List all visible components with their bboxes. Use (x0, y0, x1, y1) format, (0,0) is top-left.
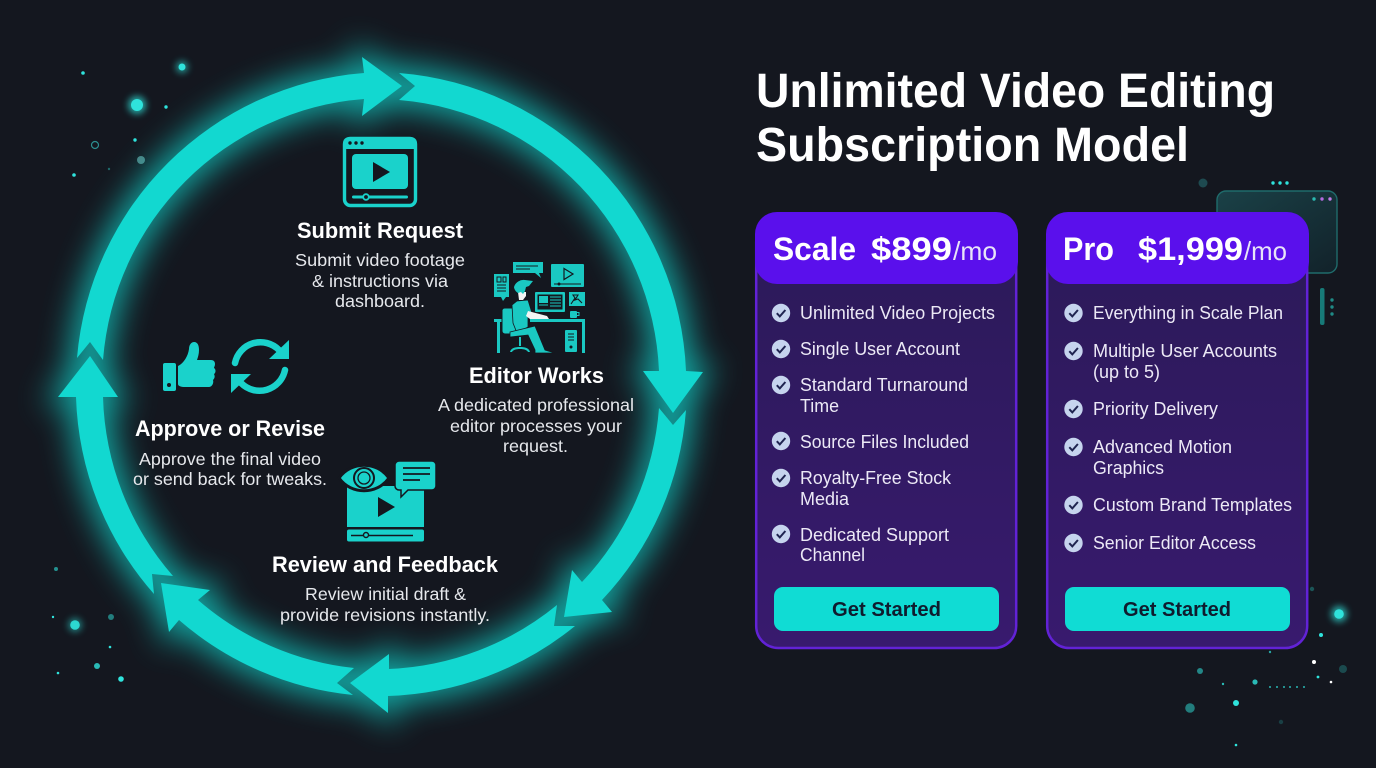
description (133, 449, 327, 489)
decorative window behind pro card (1198, 178, 1337, 325)
step: review and feedback (272, 461, 499, 625)
feature list: Channel (800, 545, 865, 565)
feature list: Media (800, 489, 850, 509)
description: & instructions via (312, 271, 448, 291)
plan price (871, 231, 997, 267)
feature list: Royalty-Free Stock (800, 468, 952, 488)
feature list: Standard Turnaround (800, 375, 968, 395)
description: provide revisions instantly. (280, 605, 490, 625)
description: or send back for tweaks. (133, 469, 327, 489)
icon: eye, video and speech bubble (339, 461, 436, 542)
feature list: Advanced Motion (1093, 437, 1232, 457)
title: Subscription Model (756, 119, 1189, 172)
description (295, 250, 465, 311)
card header (755, 212, 1018, 284)
feature list: Senior Editor Access (1093, 533, 1256, 553)
button (774, 587, 999, 631)
feature list: Time (800, 396, 839, 416)
heading: Review and Feedback (272, 552, 499, 577)
step: submit request (295, 137, 465, 311)
heading: Submit Request (297, 218, 464, 243)
feature list: Priority Delivery (1093, 399, 1218, 419)
feature list: Dedicated Support (800, 525, 949, 545)
feature list: Multiple User Accounts (1093, 341, 1277, 361)
decorative particles bottom right (1185, 587, 1347, 746)
feature list: Source Files Included (800, 432, 969, 452)
plan price: /mo (953, 236, 997, 266)
plan price: /mo (1244, 236, 1287, 266)
card header (1046, 212, 1309, 284)
cycle ring of six glowing arrows (58, 57, 703, 713)
decorative particles left bottom (52, 567, 124, 682)
feature list: Graphics (1093, 458, 1164, 478)
description: Review initial draft & (305, 584, 466, 604)
plan price: $1,999 (1138, 231, 1243, 267)
plan price: $899 (871, 231, 952, 267)
feature list (772, 303, 995, 565)
description: Approve the final video (139, 449, 321, 469)
title (756, 65, 1275, 172)
icon: thumbs up (163, 342, 216, 391)
title: Unlimited Video Editing (756, 65, 1275, 118)
panel: pro plan (1046, 212, 1309, 648)
card body (1047, 220, 1307, 648)
description: A dedicated professional (438, 395, 634, 415)
heading: Editor Works (469, 363, 604, 388)
decorative particles left top (72, 61, 188, 177)
feature list: Everything in Scale Plan (1093, 303, 1283, 323)
feature list (1064, 303, 1292, 553)
plan name: Pro (1063, 231, 1114, 267)
step: approve or revise (133, 340, 327, 489)
button: Get Started (1123, 599, 1231, 621)
icon: editor at desk (494, 262, 585, 353)
description: Submit video footage (295, 250, 465, 270)
step: editor works (438, 262, 634, 456)
description: editor processes your (450, 416, 622, 436)
heading: Approve or Revise (135, 416, 325, 441)
button (1065, 587, 1290, 631)
icon: revise arrows (231, 340, 289, 393)
button: Get Started (832, 599, 941, 621)
description: request. (503, 436, 568, 456)
feature list: (up to 5) (1093, 362, 1160, 382)
card body (756, 220, 1016, 648)
icon: video window (343, 137, 417, 206)
feature list: Single User Account (800, 339, 960, 359)
plan price (1138, 231, 1287, 267)
description (280, 584, 490, 625)
panel: scale plan (755, 212, 1018, 648)
feature list: Unlimited Video Projects (800, 303, 995, 323)
description (438, 395, 634, 456)
description: dashboard. (335, 291, 425, 311)
plan name: Scale (773, 231, 856, 267)
feature list: Custom Brand Templates (1093, 495, 1292, 515)
